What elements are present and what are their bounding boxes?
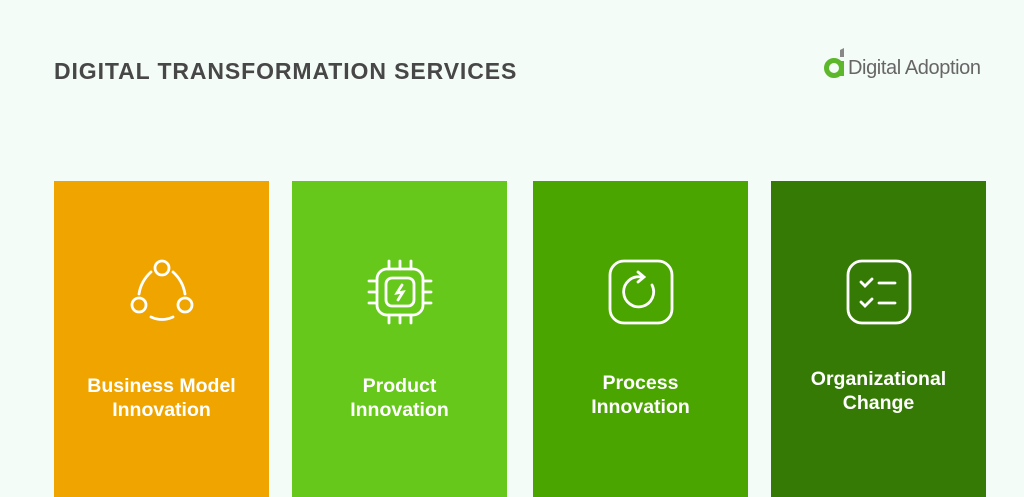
- logo: [824, 48, 981, 79]
- label: Innovation: [350, 399, 449, 421]
- label: [811, 368, 946, 414]
- logo: Digital Adoption: [848, 57, 981, 79]
- label: [350, 375, 449, 421]
- title: DIGITAL TRANSFORMATION SERVICES: [54, 58, 517, 84]
- panel: organizational change: [771, 181, 986, 497]
- panel: product innovation: [292, 181, 507, 497]
- label: [87, 375, 236, 421]
- label: Innovation: [112, 399, 211, 421]
- label: Innovation: [591, 396, 690, 418]
- icon: refresh: [608, 260, 674, 324]
- label: [591, 372, 690, 418]
- icon: checklist: [846, 260, 912, 324]
- label: Product: [363, 375, 436, 397]
- panel: process innovation: [533, 181, 748, 497]
- icon: chip: [368, 260, 432, 324]
- panel: business model innovation: [54, 181, 269, 497]
- label: Business Model: [87, 375, 236, 397]
- label: Change: [843, 392, 914, 414]
- icon: network: [130, 260, 194, 321]
- label: Process: [603, 372, 678, 394]
- label: Organizational: [811, 368, 946, 390]
